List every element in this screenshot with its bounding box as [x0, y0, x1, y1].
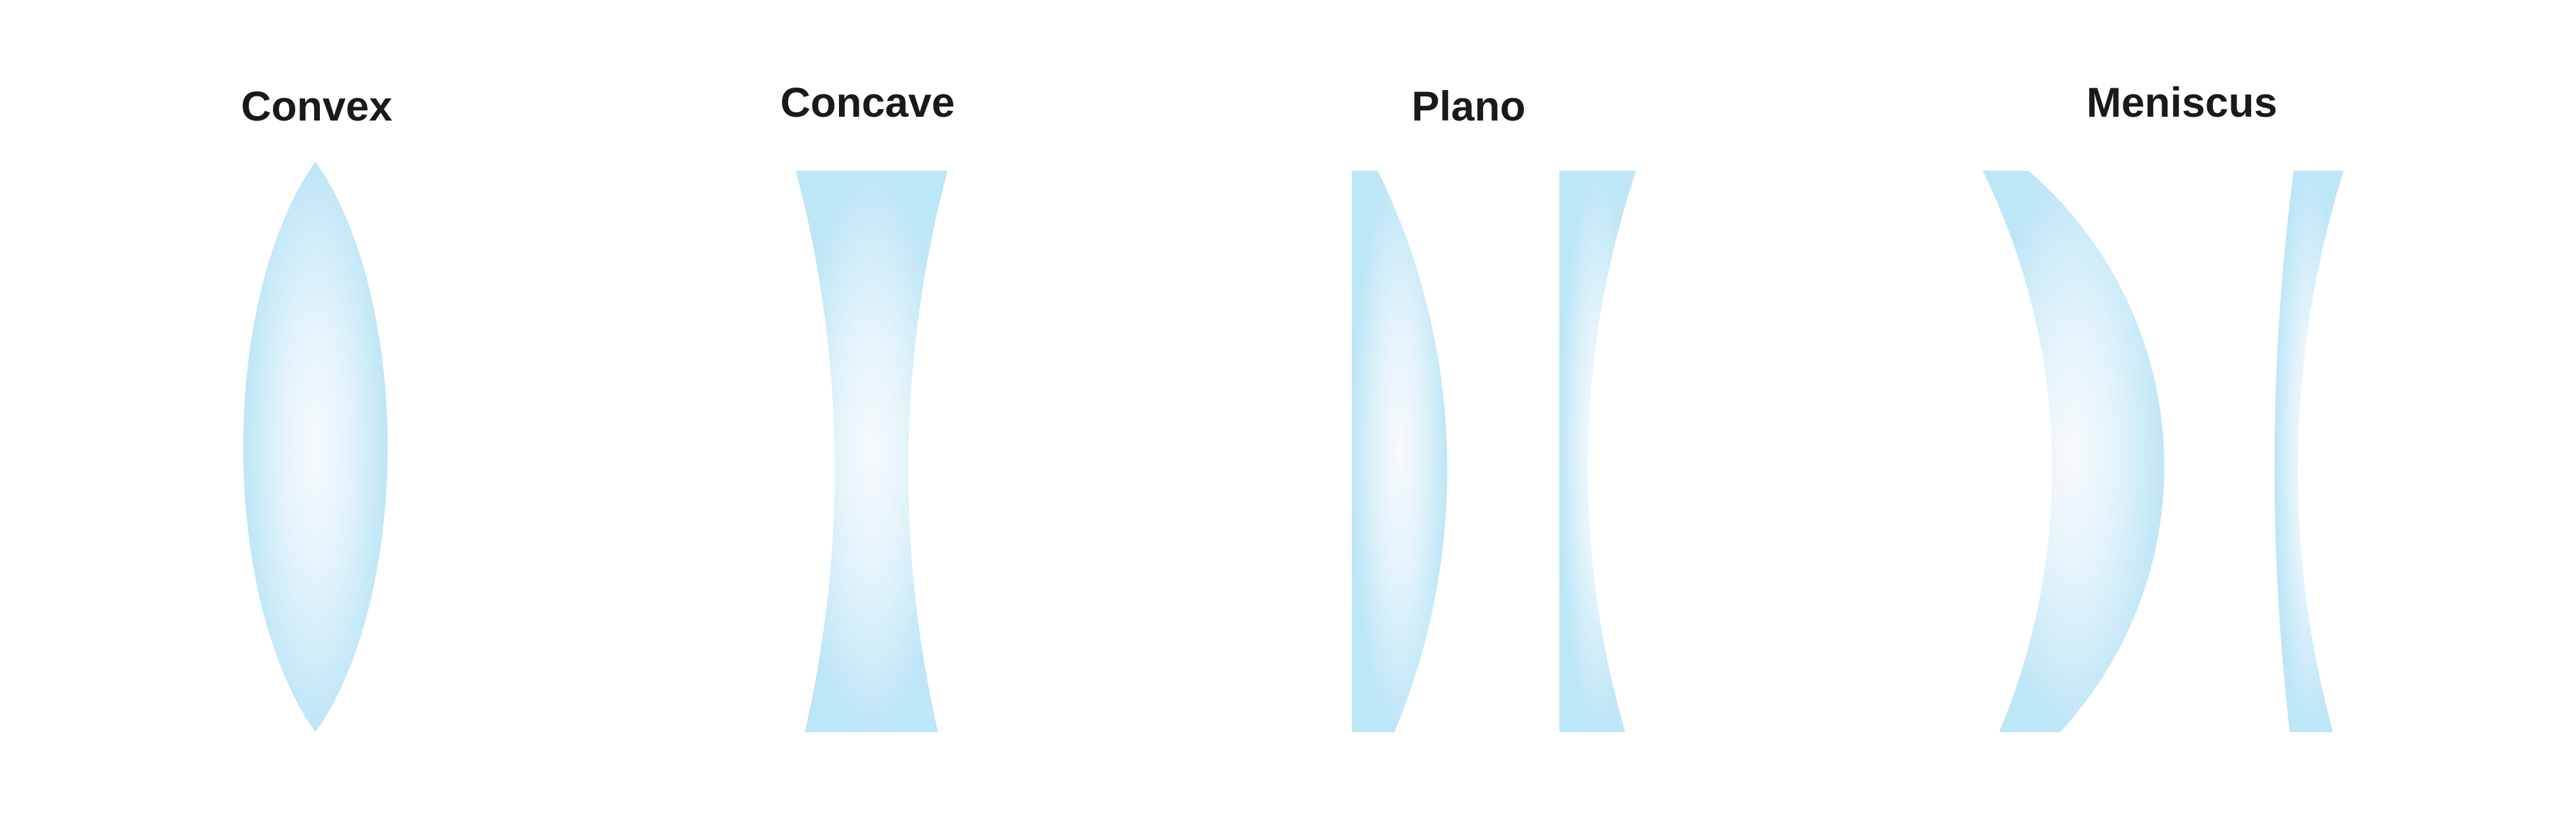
lens: negative meniscus	[2275, 171, 2344, 732]
lens: plano-concave	[1559, 171, 1636, 732]
title: Plano: Plano	[1411, 82, 1526, 129]
group: plano lenses	[1352, 171, 1636, 732]
title: Concave: Concave	[780, 79, 955, 126]
title: Meniscus: Meniscus	[2087, 79, 2277, 126]
lens: concave	[796, 171, 948, 732]
lens: convex	[243, 162, 388, 732]
group: meniscus lenses	[1983, 171, 2344, 732]
lens: plano-convex	[1352, 171, 1447, 732]
title: Convex: Convex	[241, 82, 392, 129]
lens: positive meniscus	[1983, 171, 2164, 732]
